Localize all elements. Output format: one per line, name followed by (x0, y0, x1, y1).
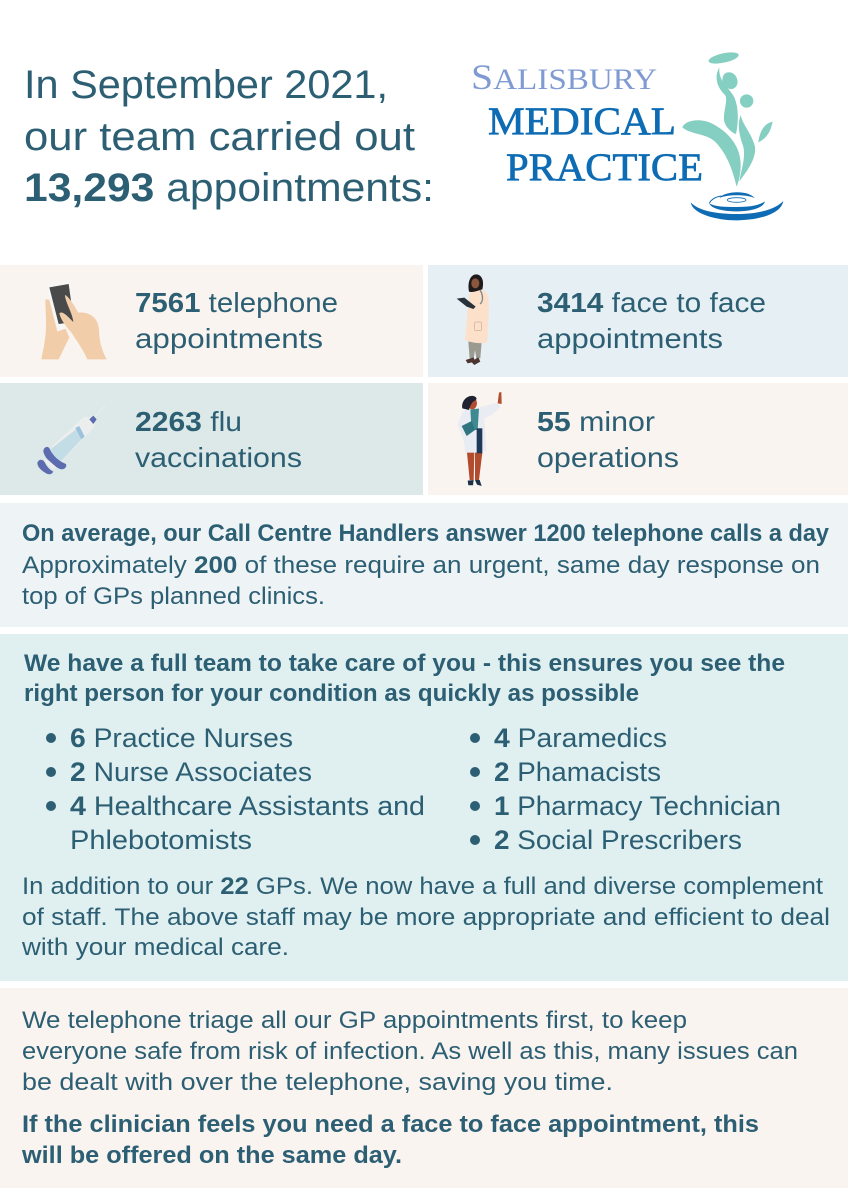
logo: Salisbury Medical Practice: MEDICAL (488, 100, 676, 143)
icon: doctor with clipboard (457, 274, 489, 365)
list: staff left column: 6 Practice Nurses (70, 723, 293, 753)
panel: face to face appointments: 3414 face to face (537, 287, 766, 318)
icon: syringe (37, 406, 105, 474)
panel: face to face appointments (428, 265, 848, 377)
logo: Salisbury Medical Practice (471, 50, 783, 220)
text block: GPs complement: In addition to our 22 GPs. We now have a full and diverse complement (22, 873, 823, 900)
list: staff left column: 2 Nurse Associates (70, 757, 312, 787)
panel: flu vaccinations: vaccinations (135, 442, 302, 473)
panel: call centre: Approximately 200 of these require an urgent, same day response on (22, 552, 820, 579)
text block: triage: everyone safe from risk of infection. As well as this, many issues can (22, 1038, 798, 1065)
list: staff right column: 1 Pharmacy Technician (494, 791, 781, 821)
panel: face to face appointments: appointments (537, 323, 723, 354)
panel: call centre: On average, our Call Centre Handlers answer 1200 telephone calls a day (22, 520, 829, 547)
list: staff right column: 4 Paramedics (494, 723, 667, 753)
title: 13,293 appointments: (24, 166, 434, 210)
panel: full team (0, 634, 848, 981)
list: staff left column: 4 Healthcare Assistants and (70, 791, 425, 821)
panel: telephone appointments: 7561 telephone (135, 287, 338, 318)
logo: Salisbury Medical Practice: PRACTICE (506, 146, 703, 189)
list: staff right column: 2 Social Prescribers (494, 825, 742, 855)
text block: GPs complement (21, 873, 830, 961)
panel: flu vaccinations: 2263 flu (135, 406, 242, 437)
heading: full team (24, 650, 785, 707)
title (24, 63, 434, 210)
panel: telephone appointments: appointments (135, 323, 323, 354)
text block: triage: We telephone triage all our GP appointments first, to keep (22, 1007, 687, 1034)
list: staff right column: 2 Phamacists (494, 757, 661, 787)
panel: telephone appointments (0, 265, 423, 377)
text block: GPs complement: of staff. The above staff may be more appropriate and efficient to deal (22, 904, 830, 931)
heading: full team: right person for your condition as quickly as possible (24, 680, 639, 707)
panel: call centre (0, 503, 848, 627)
callout: same day: will be offered on the same day. (21, 1142, 402, 1169)
list: staff left column (46, 723, 425, 855)
list: staff left column: Phlebotomists (70, 825, 252, 855)
text block: triage (22, 1007, 798, 1096)
heading: full team: We have a full team to take care of you - this ensures you see the (24, 650, 785, 677)
text block: GPs complement: with your medical care. (21, 934, 289, 961)
title: our team carried out (24, 115, 415, 159)
panel: minor operations (428, 383, 848, 495)
panel: minor operations: 55 minor (537, 406, 655, 437)
panel: telephone triage (0, 988, 848, 1188)
icon: hand holding phone (41, 280, 107, 359)
logo: Salisbury Medical Practice: SALISBURY (471, 57, 657, 97)
title: In September 2021, (24, 63, 388, 107)
text block: triage: be dealt with over the telephone, saving you time. (22, 1069, 613, 1096)
icon: doctor raising hand (458, 392, 502, 486)
panel: flu vaccinations (0, 383, 423, 495)
panel: call centre: top of GPs planned clinics. (22, 583, 325, 610)
panel: minor operations: operations (537, 442, 679, 473)
callout: same day (21, 1111, 759, 1169)
list: staff right column (470, 723, 781, 855)
callout: same day: If the clinician feels you need a face to face appointment, this (22, 1111, 759, 1138)
